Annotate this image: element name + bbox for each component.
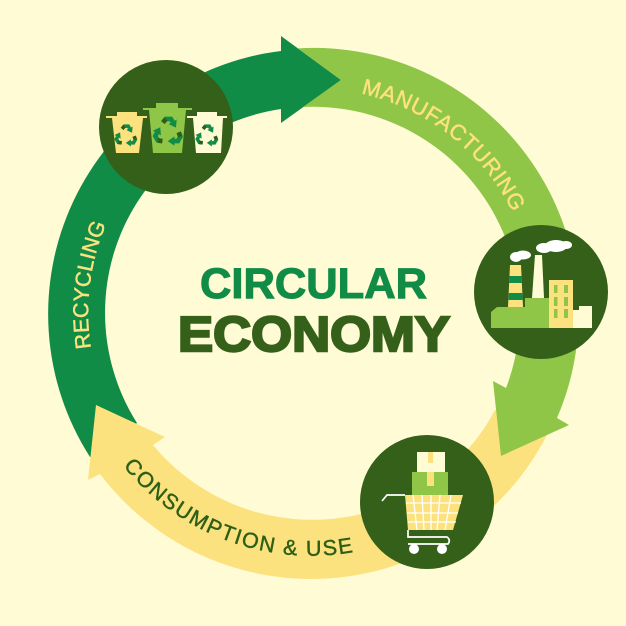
chimney striped [508, 265, 523, 307]
icon: shopping cart [360, 435, 494, 569]
box top [417, 452, 445, 472]
chimney cream [532, 255, 544, 298]
box bottom [412, 472, 448, 495]
arrow: recycling (dark green) [48, 36, 341, 457]
icon: white bin [187, 112, 227, 153]
label: consumption and use: CONSUMPTION & USE [126, 460, 353, 556]
arrow: consumption and use (yellow) [88, 405, 547, 579]
arrow: manufacturing (light green) [298, 48, 579, 456]
label: recycling: RECYCLING [72, 222, 104, 348]
wheels [409, 544, 419, 554]
icon: factory [474, 225, 608, 359]
icon: recycling bins [99, 60, 233, 194]
green building [491, 298, 549, 328]
smoke [510, 240, 572, 262]
icon: green bin [143, 103, 192, 153]
title: circular economy [178, 260, 450, 362]
yellow building [549, 280, 573, 328]
basket [405, 495, 463, 530]
title line: circular: CIRCULAR [200, 260, 427, 308]
title line: economy: ECONOMY [178, 308, 450, 362]
label: manufacturing: MANUFACTURING [362, 78, 524, 210]
icon: yellow bin [106, 112, 147, 153]
cream building [573, 306, 592, 328]
